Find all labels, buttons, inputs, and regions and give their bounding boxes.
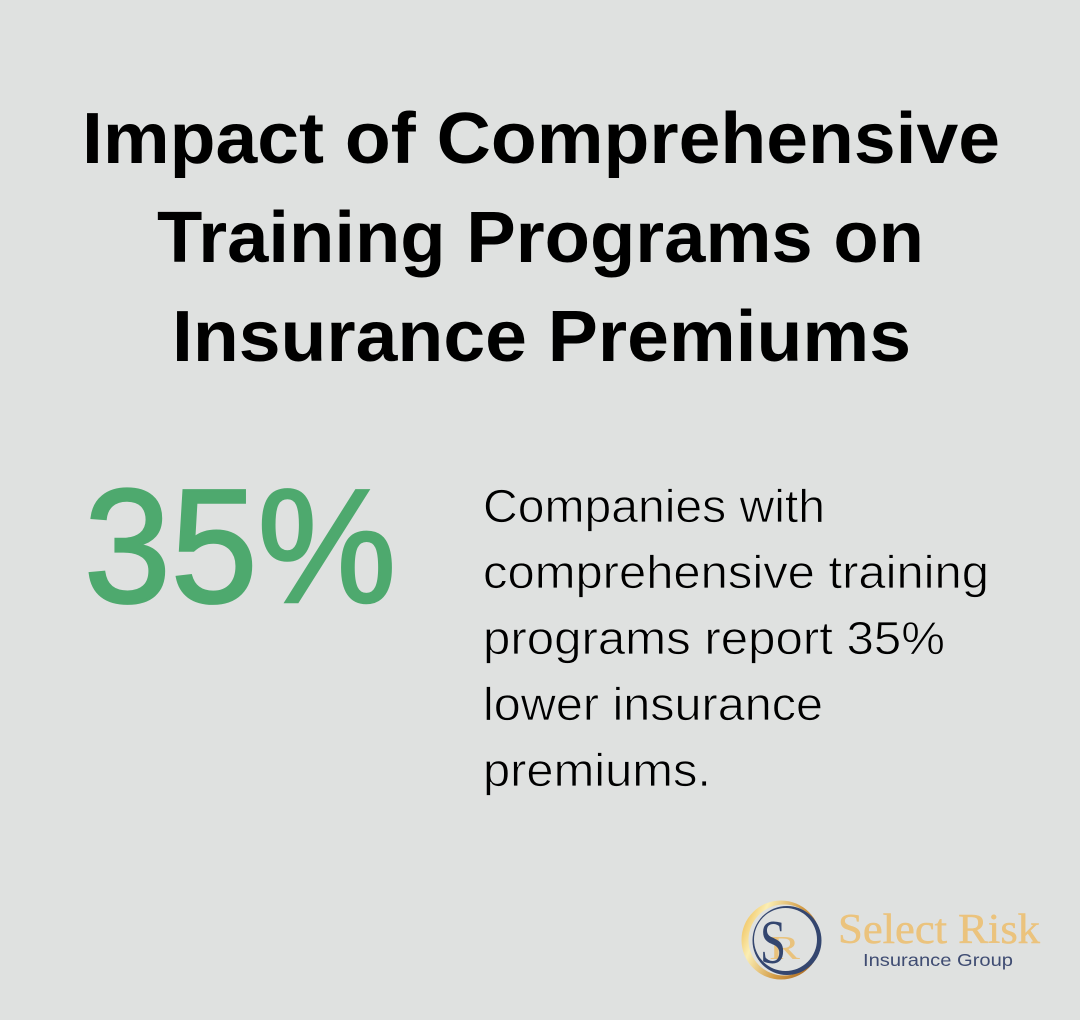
icon: SR monogram ring: R [769, 930, 800, 967]
description text: comprehensive training [483, 546, 989, 598]
icon: SR monogram ring [742, 900, 822, 980]
title [82, 99, 1000, 377]
big stat: 35%: 35% [84, 455, 396, 637]
title: Training Programs on [157, 198, 924, 278]
title: Insurance Premiums [172, 297, 911, 377]
logo tagline: Insurance Group [863, 950, 1013, 970]
description text [483, 480, 989, 796]
description text: programs report 35% [483, 612, 945, 664]
description text: Companies with [483, 480, 825, 532]
description text: lower insurance [483, 678, 823, 730]
logo: Select Risk Insurance Group [742, 900, 1040, 980]
description text: premiums. [483, 744, 711, 796]
logo name: Select Risk [838, 907, 1040, 953]
title: Impact of Comprehensive [82, 99, 1000, 179]
icon: SR monogram ring: S [760, 909, 786, 977]
